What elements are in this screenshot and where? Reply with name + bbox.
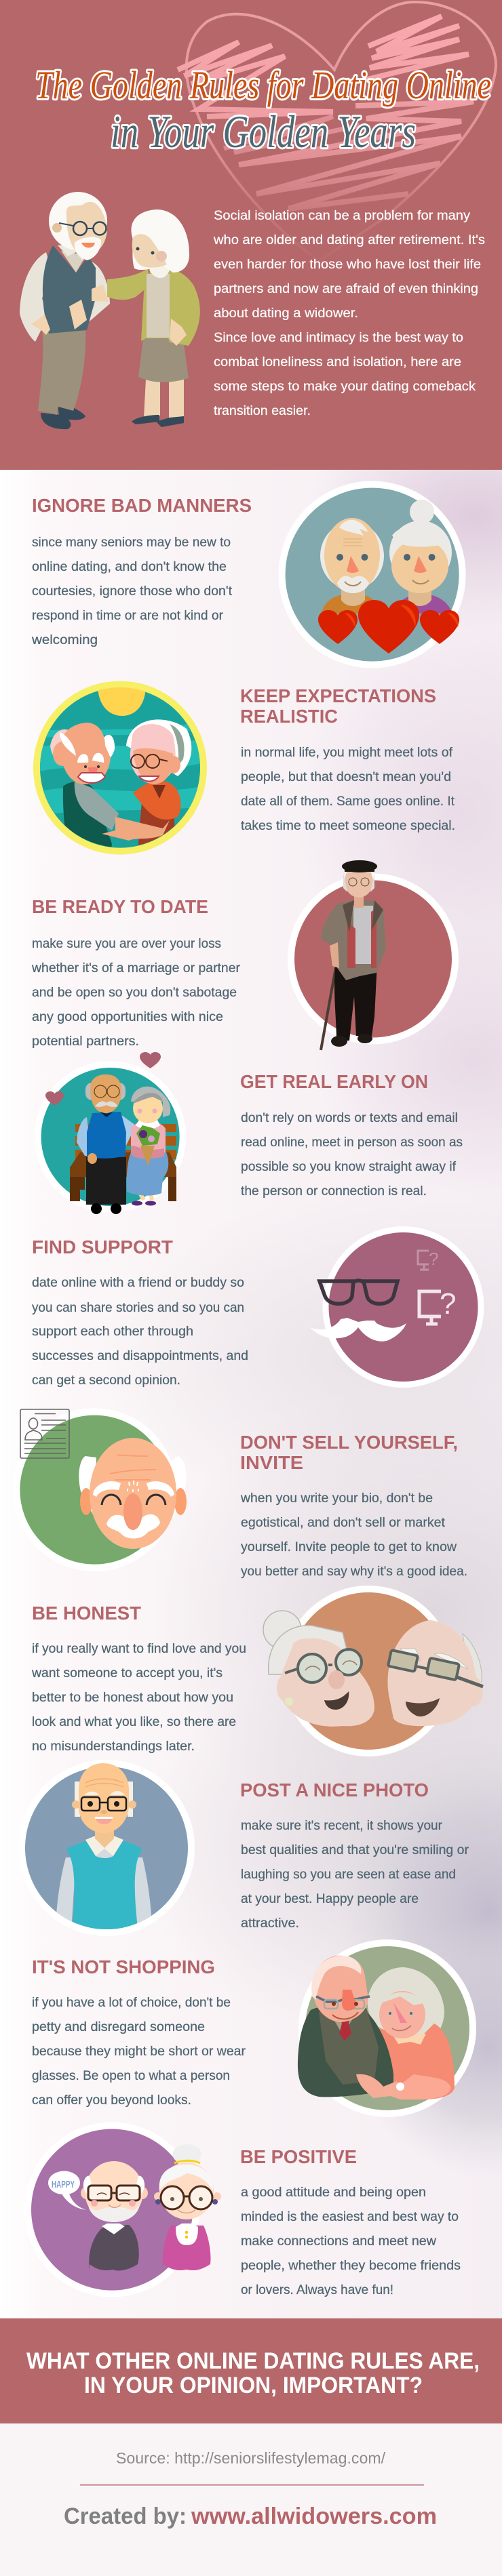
body text: you better and say why it's a good idea.: [241, 1565, 467, 1579]
icon: faded computer: [418, 1249, 438, 1270]
title: in Your Golden Years: [111, 106, 416, 157]
credit: [64, 2503, 437, 2529]
body text: better to be honest about how you: [32, 1691, 233, 1705]
speech bubble: [48, 2171, 86, 2210]
body text: attractive.: [241, 1916, 299, 1931]
body text: [240, 1491, 467, 1579]
body text: courtesies, ignore those who don't: [32, 584, 233, 599]
intro text: who are older and dating after retirement. It's: [213, 233, 485, 247]
body text: [241, 1111, 463, 1199]
body text: petty and disregard someone: [32, 2020, 205, 2034]
body text: because they might be short or wear: [32, 2045, 246, 2059]
scribbled heart decoration: [178, 2, 496, 261]
body text: when you write your bio, don't be: [240, 1491, 433, 1506]
illustration: laughing couple in glasses: [263, 1586, 483, 1756]
body text: egotistical, and don't sell or market: [241, 1516, 446, 1530]
source line: Source: http://seniorslifestylemag.com/: [116, 2449, 386, 2467]
body text: the person or connection is real.: [241, 1184, 427, 1199]
illustration: man in teal vest: [18, 1760, 195, 1939]
heading: IT'S NOT SHOPPING: [32, 1956, 215, 1977]
illustration: couple with hearts: [279, 481, 466, 668]
heading: DON'T SELL YOURSELF,: [240, 1432, 458, 1453]
body text: date online with a friend or buddy so: [32, 1276, 244, 1290]
body text: don't rely on words or texts and email: [241, 1111, 458, 1125]
body text: best qualities and that you're smiling or: [241, 1843, 469, 1857]
intro text: transition easier.: [214, 404, 311, 418]
panel: post a nice photo: [18, 1760, 469, 1939]
body text: want someone to accept you, it's: [31, 1666, 223, 1681]
intro text: even harder for those who have lost their life: [214, 258, 481, 272]
body text: minded is the easiest and best way to: [241, 2210, 459, 2224]
body text: [32, 1276, 248, 1388]
panel: get real early on: [35, 1052, 463, 1214]
body text: support each other through: [32, 1325, 193, 1339]
panel: it's not shopping: [32, 1939, 476, 2117]
body text: takes time to meet someone special.: [241, 819, 455, 833]
body text: [241, 746, 455, 833]
illustration: man with cane: [288, 860, 459, 1050]
body text: if you have a lot of choice, don't be: [32, 1996, 231, 2010]
bottom question banner: IN YOUR OPINION, IMPORTANT?: [84, 2373, 423, 2398]
body text: potential partners.: [32, 1034, 139, 1049]
body text: at your best. Happy people are: [241, 1892, 419, 1906]
heading: [240, 685, 436, 727]
body text: whether it's of a marriage or partner: [31, 961, 241, 975]
intro text: partners and now are afraid of even thinking: [214, 282, 478, 296]
heading: INVITE: [240, 1452, 303, 1473]
heading: BE READY TO DATE: [32, 896, 208, 917]
intro text: about dating a widower.: [214, 306, 358, 321]
illustration: glasses, mustache and computer: [310, 1226, 484, 1388]
body text: people, whether they become friends: [241, 2259, 461, 2273]
footer: [0, 2423, 502, 2576]
intro text: Since love and intimacy is the best way to: [214, 331, 463, 345]
illustration: smiling bald man and profile card: [13, 1408, 187, 1571]
icon: faded computer: ?: [429, 1249, 438, 1269]
heading: GET REAL EARLY ON: [240, 1071, 428, 1092]
panel: be ready to date: [31, 860, 459, 1050]
body text: welcoming: [31, 633, 98, 647]
body text: make sure it's recent, it shows your: [241, 1819, 443, 1833]
speech bubble: HAPPY: [52, 2179, 75, 2190]
body text: look and what you like, so there are: [32, 1715, 236, 1729]
body text: read online, meet in person as soon as: [241, 1135, 463, 1150]
body text: you can share stories and so you can: [32, 1301, 244, 1315]
body text: [241, 1819, 469, 1931]
bottom question banner: [0, 2318, 502, 2423]
intro text: some steps to make your dating comeback: [214, 380, 476, 394]
body text: in normal life, you might meet lots of: [241, 746, 453, 760]
credit: www.allwidowers.com: [191, 2503, 437, 2529]
illustration: couple holding hands: [33, 681, 207, 855]
panel: keep expectations realistic: [33, 681, 455, 855]
body text: can get a second opinion.: [32, 1373, 180, 1388]
panel: be honest: [31, 1586, 483, 1756]
body text: [31, 536, 233, 647]
man: [20, 192, 110, 429]
illustration: happy couple avatars: [24, 2122, 221, 2297]
body text: a good attitude and being open: [241, 2186, 426, 2200]
body text: yourself. Invite people to get to know: [241, 1540, 457, 1554]
body text: no misunderstandings later.: [32, 1739, 195, 1754]
woman: [92, 209, 200, 427]
heading: KEEP EXPECTATIONS: [240, 685, 436, 706]
icon: computer with question mark: [419, 1287, 456, 1324]
panel: don't sell yourself: [13, 1408, 467, 1579]
illustration: embracing couple: [298, 1939, 476, 2117]
heading: IGNORE BAD MANNERS: [32, 495, 252, 516]
illustration: elderly couple: [20, 192, 200, 429]
body text: glasses. Be open to what a person: [32, 2069, 230, 2083]
body text: date all of them. Same goes online. It: [241, 794, 455, 809]
intro text: combat loneliness and isolation, here are: [214, 355, 461, 369]
body text: respond in time or are not kind or: [32, 609, 224, 623]
icon: profile document: [20, 1409, 69, 1458]
icon: mustache: [310, 1318, 406, 1342]
panel: ignore bad manners: [31, 481, 466, 668]
body text: laughing so you are seen at ease and: [241, 1868, 456, 1882]
header panel: [0, 0, 502, 470]
icon: computer with question mark: ?: [440, 1287, 456, 1321]
heading: BE POSITIVE: [240, 2146, 357, 2167]
heading: FIND SUPPORT: [32, 1236, 173, 1257]
intro text: Social isolation can be a problem for many: [214, 209, 471, 223]
body text: and be open so you don't sabotage: [32, 986, 237, 1000]
body text: [241, 2186, 461, 2297]
illustration: couple on a bench: [35, 1052, 186, 1214]
credit: Created by:: [64, 2503, 187, 2529]
body text: any good opportunities with nice: [32, 1010, 223, 1024]
body text: possible so you know straight away if: [241, 1160, 457, 1174]
body text: make connections and meet new: [241, 2234, 436, 2249]
panel: be positive: [24, 2122, 461, 2297]
body text: can offer you beyond looks.: [32, 2093, 191, 2108]
body text: [31, 937, 241, 1049]
body text: make sure you are over your loss: [32, 937, 221, 951]
bottom question banner: WHAT OTHER ONLINE DATING RULES ARE,: [26, 2348, 480, 2374]
body text: online dating, and don't know the: [32, 560, 227, 574]
body text: [32, 1996, 246, 2108]
body text: people, but that doesn't mean you'd: [241, 770, 451, 784]
heading: [240, 1432, 458, 1473]
icon: glasses: [320, 1281, 398, 1304]
heading: POST A NICE PHOTO: [240, 1779, 429, 1800]
body text: successes and disappointments, and: [32, 1349, 248, 1363]
title: [35, 63, 491, 157]
intro text: [213, 209, 485, 418]
heading: BE HONEST: [32, 1603, 141, 1624]
body text: [31, 1642, 246, 1754]
body text: or lovers. Always have fun!: [241, 2283, 393, 2297]
body text: since many seniors may be new to: [32, 536, 231, 550]
panel: find support: [32, 1226, 484, 1388]
body text: if you really want to find love and you: [32, 1642, 246, 1656]
heading: REALISTIC: [240, 706, 338, 727]
